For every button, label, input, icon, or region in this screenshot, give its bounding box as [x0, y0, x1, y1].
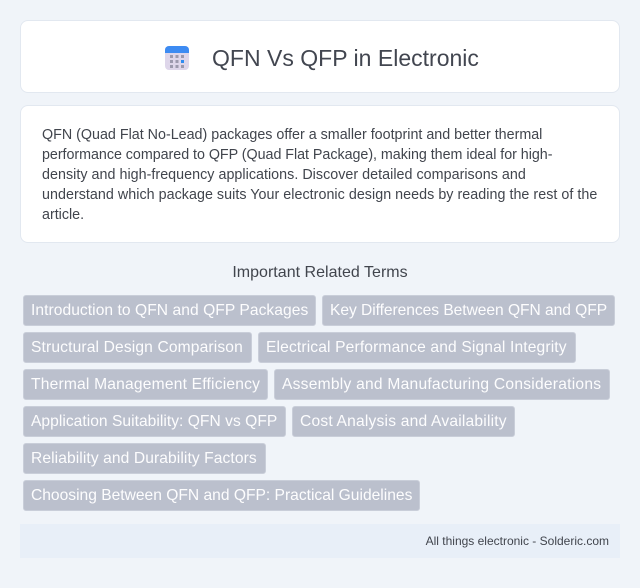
tag	[322, 295, 615, 326]
title: QFN Vs QFP in Electronic	[212, 45, 479, 71]
tag: Structural Design Comparison	[31, 339, 243, 356]
tag	[258, 332, 576, 363]
tag list	[23, 295, 615, 511]
tag	[23, 480, 420, 511]
tag: Reliability and Durability Factors	[31, 450, 257, 467]
tag	[23, 406, 286, 437]
intro paragraph: performance compared to QFP (Quad Flat Package), making them ideal for high-	[42, 147, 552, 163]
intro paragraph: article.	[42, 207, 84, 223]
tag: Thermal Management Efficiency	[31, 376, 260, 393]
tag	[23, 369, 268, 400]
tag	[23, 332, 252, 363]
icon: calendar grid	[165, 46, 189, 70]
tag	[23, 443, 266, 474]
section heading: Important Related Terms	[232, 264, 408, 281]
tag	[292, 406, 515, 437]
intro text card	[20, 105, 620, 243]
footer text: All things electronic - Solderic.com	[426, 534, 609, 548]
intro paragraph: QFN (Quad Flat No-Lead) packages offer a smaller footprint and better thermal	[42, 127, 542, 143]
tag: Cost Analysis and Availability	[300, 413, 507, 430]
tag: Application Suitability: QFN vs QFP	[31, 413, 277, 430]
tag: Choosing Between QFN and QFP: Practical Guidelines	[31, 487, 412, 504]
footer bar	[20, 524, 620, 558]
intro paragraph: density and high-frequency applications. Discover detailed comparisons and	[42, 167, 526, 183]
tag: Key Differences Between QFN and QFP	[330, 302, 607, 319]
tag	[274, 369, 610, 400]
intro paragraph	[42, 127, 597, 223]
header card	[20, 20, 620, 93]
tag: Introduction to QFN and QFP Packages	[31, 302, 308, 319]
intro paragraph: understand which package suits Your electronic design needs by reading the rest of the	[42, 187, 597, 203]
tag: Assembly and Manufacturing Considerations	[282, 376, 601, 393]
tag: Electrical Performance and Signal Integrity	[266, 339, 567, 356]
tag	[23, 295, 316, 326]
